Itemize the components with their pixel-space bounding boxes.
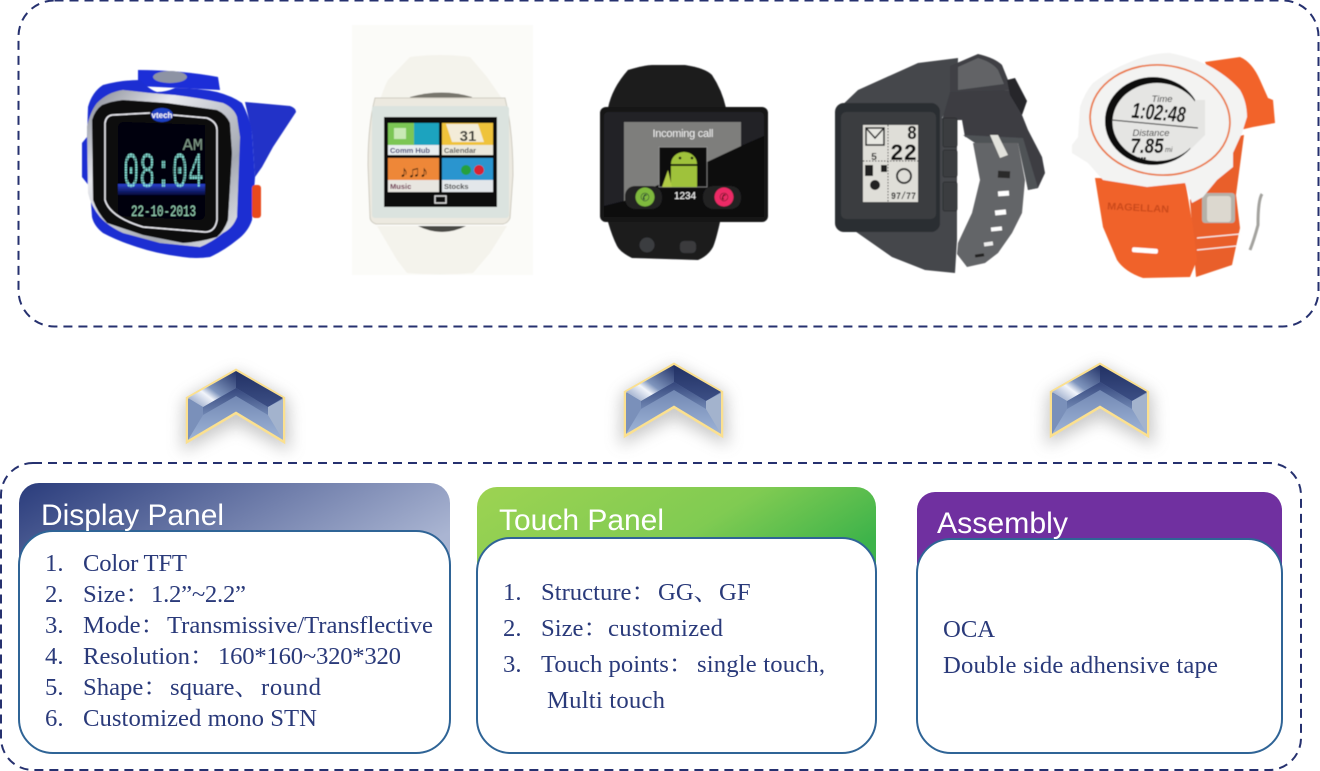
watch: grey e-ink sport watch: 8: [907, 123, 917, 145]
watch: white touch watch: ♪♫♪: [400, 164, 428, 181]
list: display panel specs: Transmissive/Transflective: [167, 612, 433, 639]
list: display panel specs: 1.: [45, 550, 64, 577]
text: assembly materials: Double side adhensive tape: [943, 652, 1218, 679]
list: display panel specs: round: [261, 674, 322, 701]
watch: orange and white sport watch: 1:02:48: [1131, 98, 1187, 127]
list: display panel specs: Color TFT: [83, 550, 187, 577]
list: touch panel specs: 1.: [503, 579, 522, 606]
list: display panel specs: Resolution：: [83, 643, 215, 670]
watch: black android watch: [600, 65, 768, 260]
list: touch panel specs: GG、: [658, 579, 718, 606]
heading: display panel: Display Panel: [41, 499, 224, 532]
watch: black android watch: ✆: [719, 192, 729, 204]
list: display panel specs: Mode：: [83, 612, 165, 639]
panel: touch panel: [477, 487, 876, 753]
watch: blue kids watch: 22-10-2013: [131, 203, 196, 221]
watch: blue kids watch: vtech: [152, 111, 173, 120]
watch: orange and white sport watch: MAGELLAN: [1107, 201, 1169, 216]
watch: orange and white sport watch: [1072, 53, 1275, 278]
watch: orange and white sport watch: 7.85: [1130, 135, 1164, 158]
list: touch panel specs: 3.: [503, 651, 522, 678]
watch: white touch watch: 31: [460, 128, 476, 145]
list: touch panel specs: Size：: [541, 615, 608, 642]
watch: blue kids watch: 08:04: [123, 146, 204, 203]
list: display panel specs: 5.: [45, 674, 64, 701]
list: touch panel specs: GF: [719, 579, 751, 606]
list: touch panel specs: single touch,: [697, 651, 825, 678]
watch: black android watch: Incoming call: [652, 128, 714, 140]
watch: orange and white sport watch: •••: [1138, 154, 1146, 163]
panel: smart watch product row: [18, 0, 1318, 326]
watch: orange and white sport watch: Distance: [1133, 128, 1169, 139]
list: display panel specs: [45, 550, 433, 732]
list: display panel specs: Shape：: [83, 674, 168, 701]
list: touch panel specs: Touch points：: [541, 651, 694, 678]
text: assembly materials: OCA: [943, 616, 995, 643]
watch: white touch watch: Stocks: [444, 182, 469, 191]
list: touch panel specs: Structure：: [541, 579, 656, 606]
watch: grey e-ink sport watch: [835, 54, 1045, 273]
watch: orange and white sport watch: Time: [1151, 94, 1173, 105]
watch: orange and white sport watch: mi: [1165, 147, 1173, 154]
panel: components: [1, 463, 1301, 770]
list: display panel specs: 160*160~320*320: [218, 643, 401, 670]
watch: grey e-ink sport watch: 97/77: [891, 191, 916, 203]
list: display panel specs: Size：: [83, 581, 150, 608]
watch: black android watch: ✆: [640, 192, 650, 204]
list: touch panel specs: customized: [608, 615, 724, 642]
list: display panel specs: 3.: [45, 612, 64, 639]
list: display panel specs: 2.: [45, 581, 64, 608]
panel: display panel: [19, 483, 450, 753]
arrow: touch panel to watches: [620, 364, 728, 446]
watch: blue kids watch: AM: [183, 137, 203, 156]
watch: white touch watch: [352, 25, 533, 275]
watch: blue kids watch: [82, 70, 296, 258]
list: display panel specs: Customized mono STN: [83, 705, 317, 732]
heading: assembly: Assembly: [937, 507, 1068, 540]
list: display panel specs: 4.: [45, 643, 64, 670]
list: display panel specs: 1.2”~2.2”: [151, 581, 246, 608]
text: assembly materials: [943, 616, 1218, 679]
list: touch panel specs: 2.: [503, 615, 522, 642]
watch: white touch watch: Comm Hub: [390, 146, 430, 155]
watch: grey e-ink sport watch: 5: [871, 152, 877, 163]
list: touch panel specs: [503, 579, 825, 714]
list: touch panel specs: Multi touch: [547, 687, 666, 714]
watch: grey e-ink sport watch: 22: [890, 141, 917, 167]
watch: black android watch: 1234: [674, 191, 696, 202]
list: display panel specs: square、: [170, 674, 259, 701]
arrow: display panel to watches: [182, 370, 290, 452]
list: display panel specs: 6.: [45, 705, 64, 732]
panel: assembly: [917, 492, 1282, 753]
watch: white touch watch: Music: [390, 182, 411, 191]
heading: touch panel: Touch Panel: [499, 504, 664, 537]
arrow: assembly to watches: [1046, 364, 1154, 446]
watch: white touch watch: Calendar: [444, 146, 476, 155]
